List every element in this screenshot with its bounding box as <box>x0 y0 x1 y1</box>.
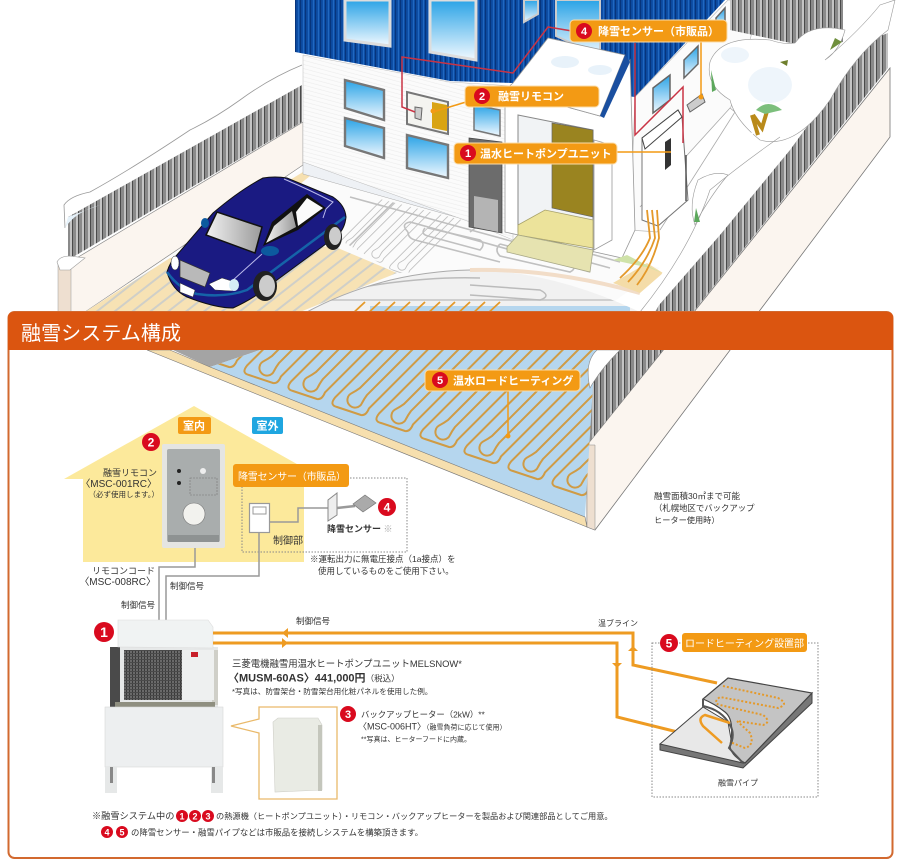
wiring: remote cord and control signal <box>159 532 259 620</box>
area note: ヒーター使用時） <box>654 515 720 525</box>
bottom notes <box>92 810 613 838</box>
pipe label: 融雪パイプ <box>718 778 758 788</box>
remote controller label: （必ず使用します。） <box>88 489 159 499</box>
panel border <box>8 312 892 858</box>
house upper blue wall <box>295 0 725 97</box>
right side wall <box>630 0 760 232</box>
outdoor unit on house <box>642 110 688 226</box>
callout 4: snow sensor <box>570 20 727 100</box>
sensor label <box>233 464 349 487</box>
note line 1: の熱源機（ヒートポンプユニット）・リモコン・バックアップヒーターを製品および関連部品としてご用意。 <box>216 811 613 821</box>
installation label <box>682 633 807 652</box>
callout 2: remote: 融雪リモコン <box>498 90 564 103</box>
entrance porch and door <box>469 38 635 272</box>
snow sensor label: 降雪センサー ※ <box>327 523 393 534</box>
callout labels over illustration <box>425 20 727 438</box>
note line 2: 5 <box>119 828 125 838</box>
control signal label on pipes: 制御信号 <box>296 616 331 626</box>
badge 5 <box>660 634 678 652</box>
note line 1: 3 <box>205 812 211 822</box>
cutaway ground view <box>305 270 640 316</box>
illustration: house and driveway <box>57 0 895 530</box>
note line 1: 2 <box>192 812 198 822</box>
badge 3: 3 <box>345 709 351 721</box>
area note <box>654 491 755 525</box>
backup heater description: **写真は、ヒーターフードに内蔵。 <box>361 734 471 744</box>
icon: snow sensor <box>328 493 376 521</box>
hot water pipes <box>213 633 722 743</box>
installation dotted box <box>652 643 818 797</box>
callout 4: snow sensor: 降雪センサー（市販品） <box>598 24 719 38</box>
snow mound and tree <box>640 0 895 312</box>
left boundary wall <box>57 65 303 312</box>
callout 1: heat pump unit: 温水ヒートポンプユニット <box>480 146 612 160</box>
badge 3 <box>340 706 356 722</box>
callout 5: road heating <box>425 370 580 438</box>
installation label: ロードヒーティング設置部 <box>685 637 804 650</box>
sensor note: 使用しているものをご使用下さい。 <box>318 566 454 576</box>
product description: 三菱電機融雪用温水ヒートポンプユニットMELSNOW* <box>232 658 462 669</box>
hot line label: 温ブライン <box>598 618 638 628</box>
callout 5: road heating: 温水ロードヒーティング <box>453 374 573 388</box>
backup heater description: バックアップヒーター（2kW）** <box>361 710 486 720</box>
driveway with snow-melting pipes <box>85 161 660 312</box>
sensor note <box>310 554 455 576</box>
heat pump unit photo <box>105 620 223 793</box>
note line 1: 1 <box>179 812 185 822</box>
control unit label: 制御部 <box>273 534 303 547</box>
badge 4 <box>378 498 396 516</box>
right boundary wall and fence <box>587 0 890 530</box>
badge 1 <box>94 622 114 642</box>
road heating blue area <box>146 350 620 528</box>
sensor note: ※運転出力に無電圧接点（1a接点）を <box>310 554 455 564</box>
wiring: control unit to sensor <box>269 508 328 522</box>
pipes entering ground <box>613 210 663 293</box>
callout 4: snow sensor: 4 <box>581 26 588 38</box>
callout 1: heat pump unit: 1 <box>465 148 471 160</box>
control signal label lower: 制御信号 <box>121 600 155 610</box>
badge 2 <box>142 433 160 451</box>
product description: 〈MUSM-60AS〉441,000円（税込） <box>228 672 400 684</box>
badge 5: 5 <box>666 636 673 650</box>
product description: *写真は、防雪架台・防雪架台用化粧パネルを使用した例。 <box>232 686 432 696</box>
sensor label: 降雪センサー（市販品） <box>238 470 346 483</box>
heater callout box <box>231 707 337 799</box>
remote cord label: リモコンコード <box>92 566 155 576</box>
remote cord label <box>79 566 156 588</box>
sensor dotted box <box>242 478 407 552</box>
heading: 融雪システム構成 <box>21 322 181 345</box>
house pictogram: indoor zone <box>64 406 304 562</box>
remote controller label: 融雪リモコン <box>103 468 157 478</box>
backup heater description: 〈MSC-006HT〉（融雪負荷に応じて使用） <box>358 722 507 732</box>
badge 2: 2 <box>148 436 155 450</box>
note line 1 <box>92 810 613 822</box>
tag: outdoor: 室外 <box>256 418 278 432</box>
note line 1: ※融雪システム中の <box>92 810 174 821</box>
slab cross-section <box>660 678 812 768</box>
remote controller label <box>80 468 159 499</box>
flow arrows <box>282 628 638 668</box>
panel header bar <box>8 312 893 350</box>
control unit box <box>250 504 270 532</box>
callout 2: remote: 2 <box>479 91 485 103</box>
remote controller <box>162 444 225 548</box>
tag: indoor: 室内 <box>183 418 205 432</box>
red signal wiring <box>402 27 683 143</box>
backup heater description <box>358 710 507 744</box>
badge 1: 1 <box>100 624 108 640</box>
tag: indoor <box>178 417 211 434</box>
house lower white wall with windows <box>303 55 513 240</box>
callout 5: road heating: 5 <box>437 375 443 387</box>
callout 2: remote <box>430 86 599 114</box>
product description <box>228 658 462 696</box>
remote controller label: 〈MSC-001RC〉 <box>80 478 157 490</box>
note line 2: の降雪センサー・融雪パイプなどは市販品を接続しシステムを構築頂きます。 <box>131 828 423 838</box>
callout 1: heat pump unit <box>454 143 671 164</box>
backup heater photo <box>273 718 322 792</box>
area note: 融雪面積30㎡まで可能 <box>654 491 740 501</box>
tag: outdoor <box>252 417 283 434</box>
car <box>167 177 346 308</box>
remote cord label: 〈MSC-008RC〉 <box>79 576 156 588</box>
area note: （札幌地区でバックアップ <box>654 503 755 513</box>
badge 4: 4 <box>384 500 391 514</box>
control signal label upper: 制御信号 <box>170 581 205 591</box>
note line 2: 4 <box>104 828 110 838</box>
panel: system configuration <box>8 312 893 858</box>
